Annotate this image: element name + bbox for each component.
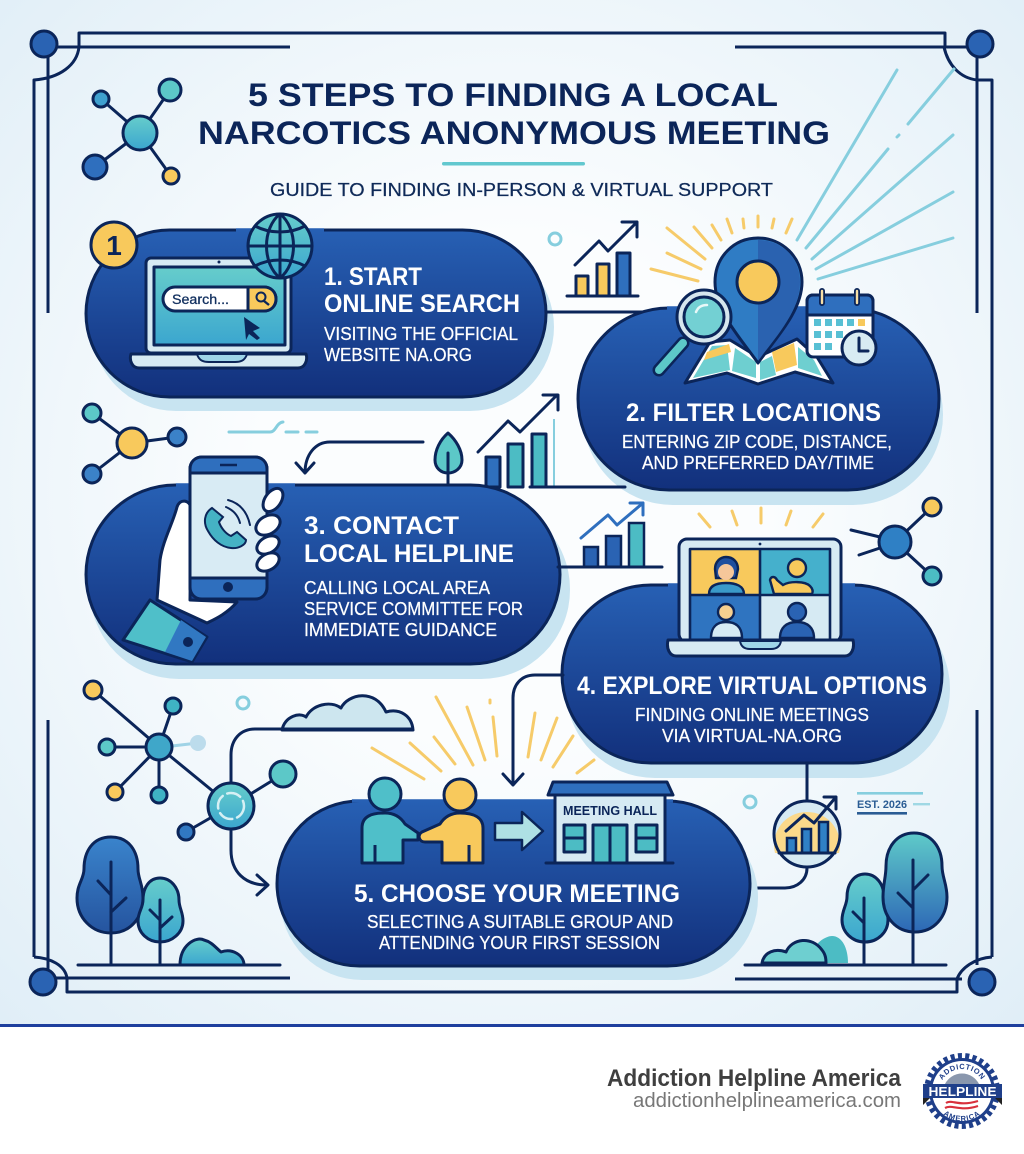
step 4 description: FINDING ONLINE MEETINGS [635,705,869,725]
step 5 description [367,912,673,953]
step 4 heading: 4. EXPLORE VIRTUAL OPTIONS [577,672,927,700]
step 3 heading: LOCAL HELPLINE [304,540,514,568]
badge logo [923,1053,1002,1129]
icon: arrow to hall [495,812,543,850]
teal rays top right [797,69,954,279]
step 1 heading: 1. START [324,263,422,291]
icon: map [685,339,833,384]
step 2 heading: 2. FILTER LOCATIONS [626,399,881,427]
title: NARCOTICS ANONYMOUS MEETING [198,115,830,151]
badge: number 1: 1 [106,230,122,261]
step 5 description: SELECTING A SUITABLE GROUP AND [367,912,673,932]
footer brand name: Addiction Helpline America [607,1065,902,1092]
icon: location pin [715,238,802,363]
pill 2 shadow [583,324,943,505]
decorative ring [237,697,249,709]
pill 2 [578,308,939,490]
step 3 description [304,578,523,640]
title divider [442,162,585,166]
panel: step 3 [86,457,570,679]
pill 1 shadow [92,243,554,411]
decorative ring right [744,796,756,808]
step 1 description: WEBSITE NA.ORG [324,345,472,365]
icon: network lower left [84,681,296,840]
icon: small tree [435,433,462,487]
badge logo: ADDICTION [939,1064,986,1080]
step 4 description: VIA VIRTUAL-NA.ORG [662,726,842,746]
footer url: addictionhelplineamerica.com [633,1090,901,1112]
icon: calendar with clock [807,291,876,365]
icon: mini chart right [558,503,662,567]
icon: network right [851,498,941,585]
title [198,77,830,151]
icon: trees right [745,833,947,965]
icon: meeting hall: MEETING HALL [563,803,657,818]
step 5 description: ATTENDING YOUR FIRST SESSION [379,933,660,953]
arrow: to step 5 [231,830,268,895]
step 1 heading: ONLINE SEARCH [324,290,520,318]
step 3 heading [304,512,514,568]
panel: step 2 [578,216,943,505]
icon: cloud [282,696,413,730]
icon: hand holding phone [123,457,287,662]
icon: growth chart middle [478,395,625,487]
rays above handshake [372,697,594,779]
badge: number 1 [91,222,137,268]
icon: globe [248,214,312,278]
connector step 1 to 2 [546,310,668,314]
dashed accent [229,422,317,432]
rays above laptop [699,508,823,527]
yellow rays [651,216,792,281]
step 1 description [324,324,518,365]
pill 1 [86,230,546,397]
step 5 heading: 5. CHOOSE YOUR MEETING [354,880,680,908]
badge logo: AMERICA [944,1111,980,1121]
icon: network top left [83,79,181,184]
panel: step 1 [86,214,554,411]
step 3 description: CALLING LOCAL AREA [304,578,490,598]
step 3 description: IMMEDIATE GUIDANCE [304,620,497,640]
arrow: to step 3 [296,442,423,473]
icon: meeting hall [546,782,673,863]
footer [0,1024,1024,1129]
pill 4 [562,585,942,763]
step 3 description: SERVICE COMMITTEE FOR [304,599,523,619]
icon: chart in circle [774,797,840,867]
step 2 description: AND PREFERRED DAY/TIME [642,453,874,473]
pill 3 [86,485,560,664]
icon: trees left [77,837,280,965]
subtitle: GUIDE TO FINDING IN-PERSON & VIRTUAL SUPPORT [270,180,773,200]
pill 5 shadow [280,815,758,980]
icon: mini chart top [549,222,638,296]
panel: step 5 [277,778,758,980]
pill 3 shadow [90,500,570,679]
step 1 description: VISITING THE OFFICIAL [324,324,518,344]
title: 5 STEPS TO FINDING A LOCAL [248,77,778,113]
connector: circle to step 5 [750,763,807,888]
step 2 description: ENTERING ZIP CODE, DISTANCE, [622,432,892,452]
panel: step 4 [562,539,950,778]
step 3 heading: 3. CONTACT [304,512,459,540]
icon: magnifying glass [659,290,731,370]
step 2 description [622,432,892,473]
pill 5 [277,801,750,966]
step 4 description [635,705,869,746]
icon: laptop video call [667,539,854,656]
connector: network to cloud [231,729,412,783]
icon: network left middle [83,404,186,483]
pill 4 shadow [566,600,950,778]
icon: laptop with search [130,258,307,368]
icon: two people shaking hands [362,778,483,863]
arrow: step 4 to step 5 [503,675,563,785]
label: est. 2026 [857,792,930,815]
label: est. 2026: EST. 2026 [857,799,907,811]
badge logo: HELPLINE [928,1084,997,1099]
decorative frame [30,31,995,995]
icon: laptop with search: Search... [172,292,229,307]
step 1 heading [324,263,520,318]
